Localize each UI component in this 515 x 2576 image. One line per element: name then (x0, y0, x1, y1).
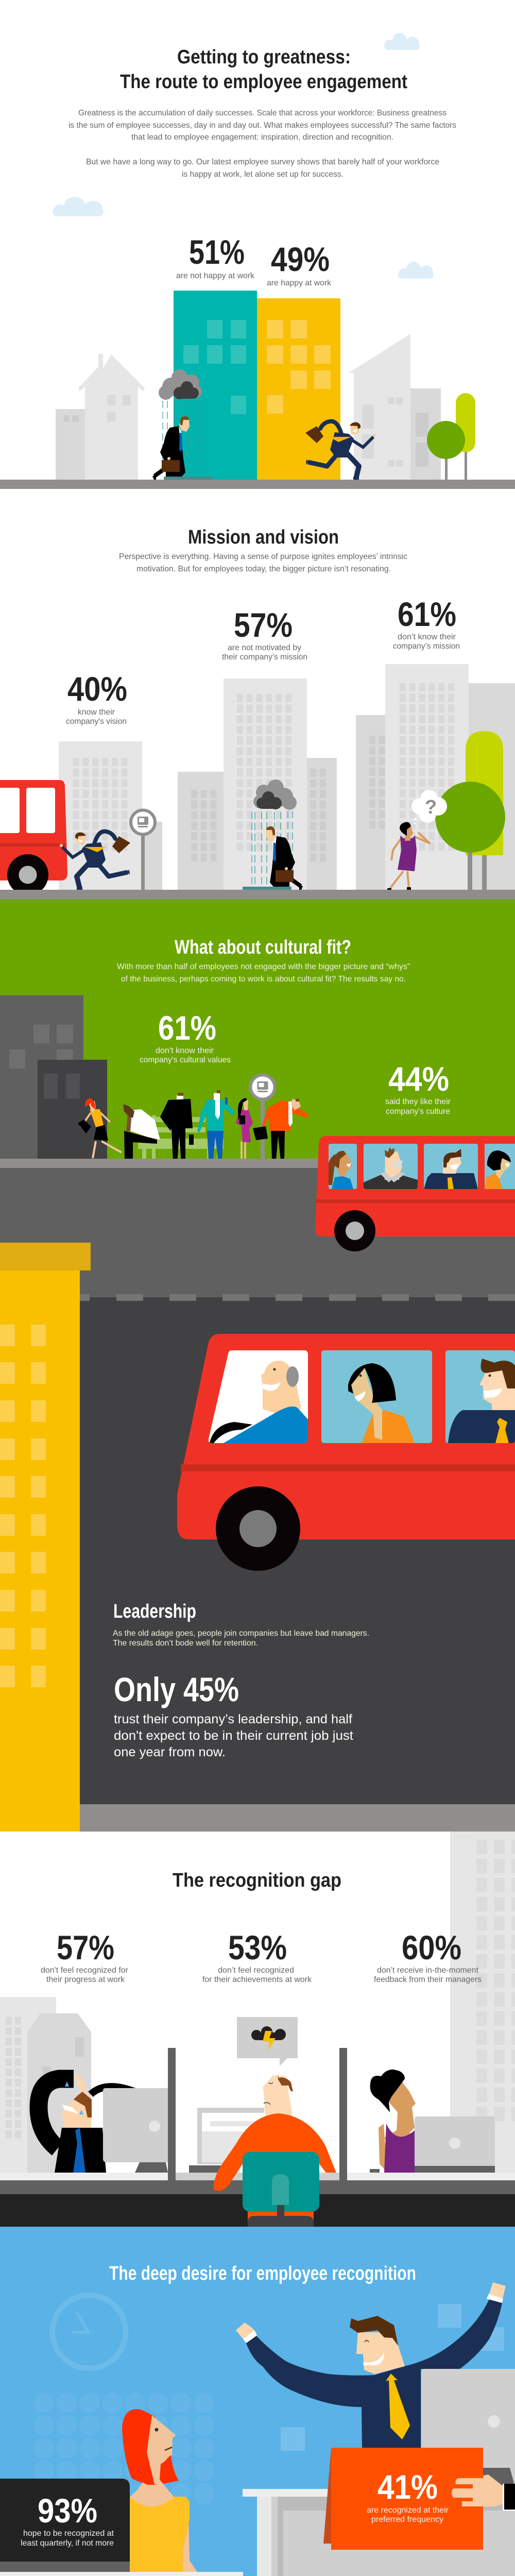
figure: woman at laptop (370, 2070, 495, 2173)
person: man in orange sweater (253, 1099, 308, 1160)
stat: 51%: are not happy at work (176, 272, 255, 280)
text block (113, 1629, 369, 1648)
stat: 53% (202, 1928, 312, 1984)
sidewalk (0, 1159, 515, 1168)
stat: 44%: said they like their (385, 1097, 451, 1106)
road dashes (80, 1294, 515, 1301)
panel: recognition gap (0, 1832, 515, 2227)
figure: woman thinking (387, 822, 430, 890)
intro text: Greatness is the accumulation of daily successes. Scale that across your workforce: Business greatness (78, 109, 447, 117)
text block: Perspective is everything. Having a sense of purpose ignites employees’ intrinsic (119, 552, 407, 561)
cloud (384, 33, 420, 50)
stat: 57%: are not motivated by (228, 643, 301, 652)
stat: 53%: don’t feel recognized (218, 1966, 294, 1975)
cloud (53, 197, 104, 216)
intro text: But we have a long way to go. Our latest employee survey shows that barely half of your workforce (86, 158, 439, 166)
stat: 40%: know their (78, 708, 115, 717)
laptop with 93% stat: least quarterly, if not more (21, 2539, 114, 2548)
laptop (415, 2116, 495, 2173)
stat: 60%: 60% (402, 1928, 461, 1967)
stat description: one year from now. (114, 1745, 226, 1759)
bench (138, 1115, 224, 1159)
laptop with 93% stat: hope to be recognized at (23, 2529, 114, 2538)
panel: mission and vision (0, 527, 515, 899)
stat: 61%: 61% (158, 1009, 216, 1047)
text block: As the old adage goes, people join companies but leave bad managers. (113, 1629, 369, 1638)
stat: 57% (41, 1928, 129, 1984)
passenger: woman with ponytail (328, 1151, 353, 1189)
passenger: man with yellow tie (424, 1149, 478, 1189)
heading: The deep desire for employee recognition (109, 2263, 416, 2284)
laptop with 93% stat: 93% (38, 2492, 97, 2530)
grey building right (349, 334, 441, 480)
figure: red bus (0, 780, 67, 895)
text block: With more than half of employees not engaged with the bigger picture and “whys” (117, 962, 410, 971)
road (0, 1168, 515, 1297)
passenger: woman with black hair (348, 1363, 415, 1443)
icon: bus stop sign (131, 810, 155, 890)
stat: 44% (385, 1060, 451, 1116)
stat: only 45%: Only 45% (114, 1670, 239, 1708)
stat: 40% (66, 670, 127, 726)
grey house left (56, 354, 145, 480)
passenger: woman with orange top (485, 1150, 511, 1189)
building: centre (178, 679, 337, 890)
figure: stressed man at laptop (39, 2074, 168, 2173)
stat: 57% (222, 606, 307, 662)
title: The route to employee engagement (120, 71, 407, 93)
person: woman in magenta dress (236, 1098, 253, 1163)
stat: 61%: don’t know their (398, 633, 456, 641)
person: man in teal shirt (197, 1090, 235, 1159)
stat: 57%: their company’s mission (222, 653, 307, 662)
stat: 61%: don't know their (156, 1046, 214, 1055)
road lower lane (0, 1297, 515, 1804)
figure: happy man with raised arms (236, 2282, 506, 2448)
yellow building (0, 1243, 91, 1832)
panel: leadership (0, 1243, 515, 1832)
figure: woman with red hair (122, 2409, 197, 2572)
laptop with 93% stat (0, 2479, 130, 2572)
office chair (214, 2152, 319, 2227)
thought bubble with question mark: ? (425, 796, 437, 818)
text block: motivation. But for employees today, the bigger picture isn’t resonating. (136, 565, 391, 573)
stat: 49% (267, 240, 332, 287)
wall notes (281, 2304, 504, 2451)
intro text: is the sum of employee successes, day in and day out. What makes employees successful? The same factors (68, 121, 456, 130)
building: left (59, 741, 162, 890)
thought bubble with question mark (411, 790, 447, 824)
ground (0, 890, 515, 899)
title: Getting to greatness: (177, 46, 351, 68)
intro text: is happy at work, let alone set up for success. (182, 170, 344, 179)
stat description (114, 1712, 353, 1759)
stat: 53%: for their achievements at work (202, 1975, 312, 1984)
yellow building (257, 298, 340, 480)
stat: 40%: 40% (67, 670, 127, 708)
text block (119, 552, 407, 573)
orange sign with 41% stat: are recognized at their (367, 2506, 449, 2515)
stat: 57%: their progress at work (46, 1975, 125, 1984)
cubicle dividers (168, 2048, 347, 2180)
teal building (174, 291, 257, 480)
panel: deep desire for recognition (0, 2227, 515, 2576)
heading: Mission and vision (188, 527, 339, 548)
passenger: man in dark sweater (364, 1147, 418, 1189)
stat: 61% (393, 595, 460, 651)
stat: 53%: 53% (228, 1928, 287, 1967)
stat: 51% (176, 233, 255, 280)
ground (0, 480, 515, 489)
trees (435, 731, 505, 890)
speech bubble with storm cloud (237, 2017, 298, 2066)
text block: of the business, perhaps coming to work is about cultural fit? The results say no. (121, 975, 406, 984)
stat: 44%: 44% (388, 1060, 449, 1098)
red bus with passengers (315, 1136, 515, 1251)
intro text (68, 109, 456, 179)
stat: 44%: company's culture (386, 1107, 450, 1116)
text block: The results don’t bode well for retention. (113, 1639, 258, 1648)
stat: 61%: 61% (398, 595, 456, 633)
big red bus (177, 1334, 515, 1571)
panel: cultural fit (0, 899, 515, 1804)
figure: sad man under rain cloud (152, 369, 213, 480)
heading: Leadership (113, 1601, 196, 1622)
trees (427, 393, 475, 480)
stat: 51%: 51% (189, 233, 245, 271)
building: right (356, 664, 515, 890)
icon: bus stop sign (250, 1075, 275, 1159)
stat: 61% (140, 1009, 231, 1064)
passenger: man with brown hair (448, 1359, 515, 1443)
stat: 40%: company's vision (66, 717, 127, 726)
people waiting at bus stop (78, 1090, 308, 1163)
person: man in black suit (160, 1093, 194, 1162)
grey screen (421, 2369, 515, 2489)
green background (0, 899, 515, 1159)
driver (210, 1361, 308, 1443)
orange sign with 41% stat: preferred frequency (371, 2515, 443, 2524)
stat description: trust their company’s leadership, and half (114, 1712, 352, 1726)
text block (117, 962, 410, 984)
stat: 57%: 57% (234, 606, 293, 644)
hand holding sign (452, 2475, 515, 2511)
stat: 60% (374, 1928, 482, 1984)
background buildings (0, 1832, 515, 2173)
heading: The recognition gap (173, 1870, 341, 1891)
title (120, 46, 407, 93)
ground (80, 1804, 515, 1832)
figure: happy running man (305, 421, 376, 480)
figure: monitor (189, 2108, 264, 2173)
stat: 60%: don’t receive in-the-moment (377, 1966, 479, 1975)
figure: running man (60, 832, 130, 890)
left desk (0, 2572, 243, 2576)
orange sign with 41% stat: 41% (377, 2468, 438, 2506)
figure: frustrated man in orange (214, 2074, 340, 2191)
stat: 61%: company's cultural values (140, 1056, 231, 1064)
stat: 61%: company’s mission (393, 642, 460, 651)
stat description: don't expect to be in their current job just (114, 1728, 353, 1743)
heading: What about cultural fit? (175, 937, 351, 958)
cloud (398, 262, 434, 279)
person: man bent over on bench (123, 1104, 160, 1160)
icon: wall clock (53, 2295, 126, 2368)
figure: sad man in the rain (243, 779, 303, 890)
right desk (243, 2489, 515, 2576)
wall pattern (32, 2392, 215, 2505)
panel: intro (0, 33, 515, 489)
stat: 49%: 49% (271, 240, 330, 278)
laptop (103, 2088, 168, 2173)
stat: 49%: are happy at work (267, 279, 332, 287)
orange sign with 41% stat (323, 2448, 483, 2550)
desk (0, 2173, 515, 2227)
intro text: that lead to employee engagement: inspiration, direction and recognition. (131, 133, 393, 142)
person: redhead woman (78, 1098, 122, 1158)
stat: 57%: don't feel recognized for (41, 1966, 129, 1975)
stat: 57%: 57% (57, 1928, 114, 1967)
stat: 60%: feedback from their managers (374, 1975, 482, 1984)
blue background (0, 2227, 515, 2576)
dark buildings (0, 995, 107, 1159)
